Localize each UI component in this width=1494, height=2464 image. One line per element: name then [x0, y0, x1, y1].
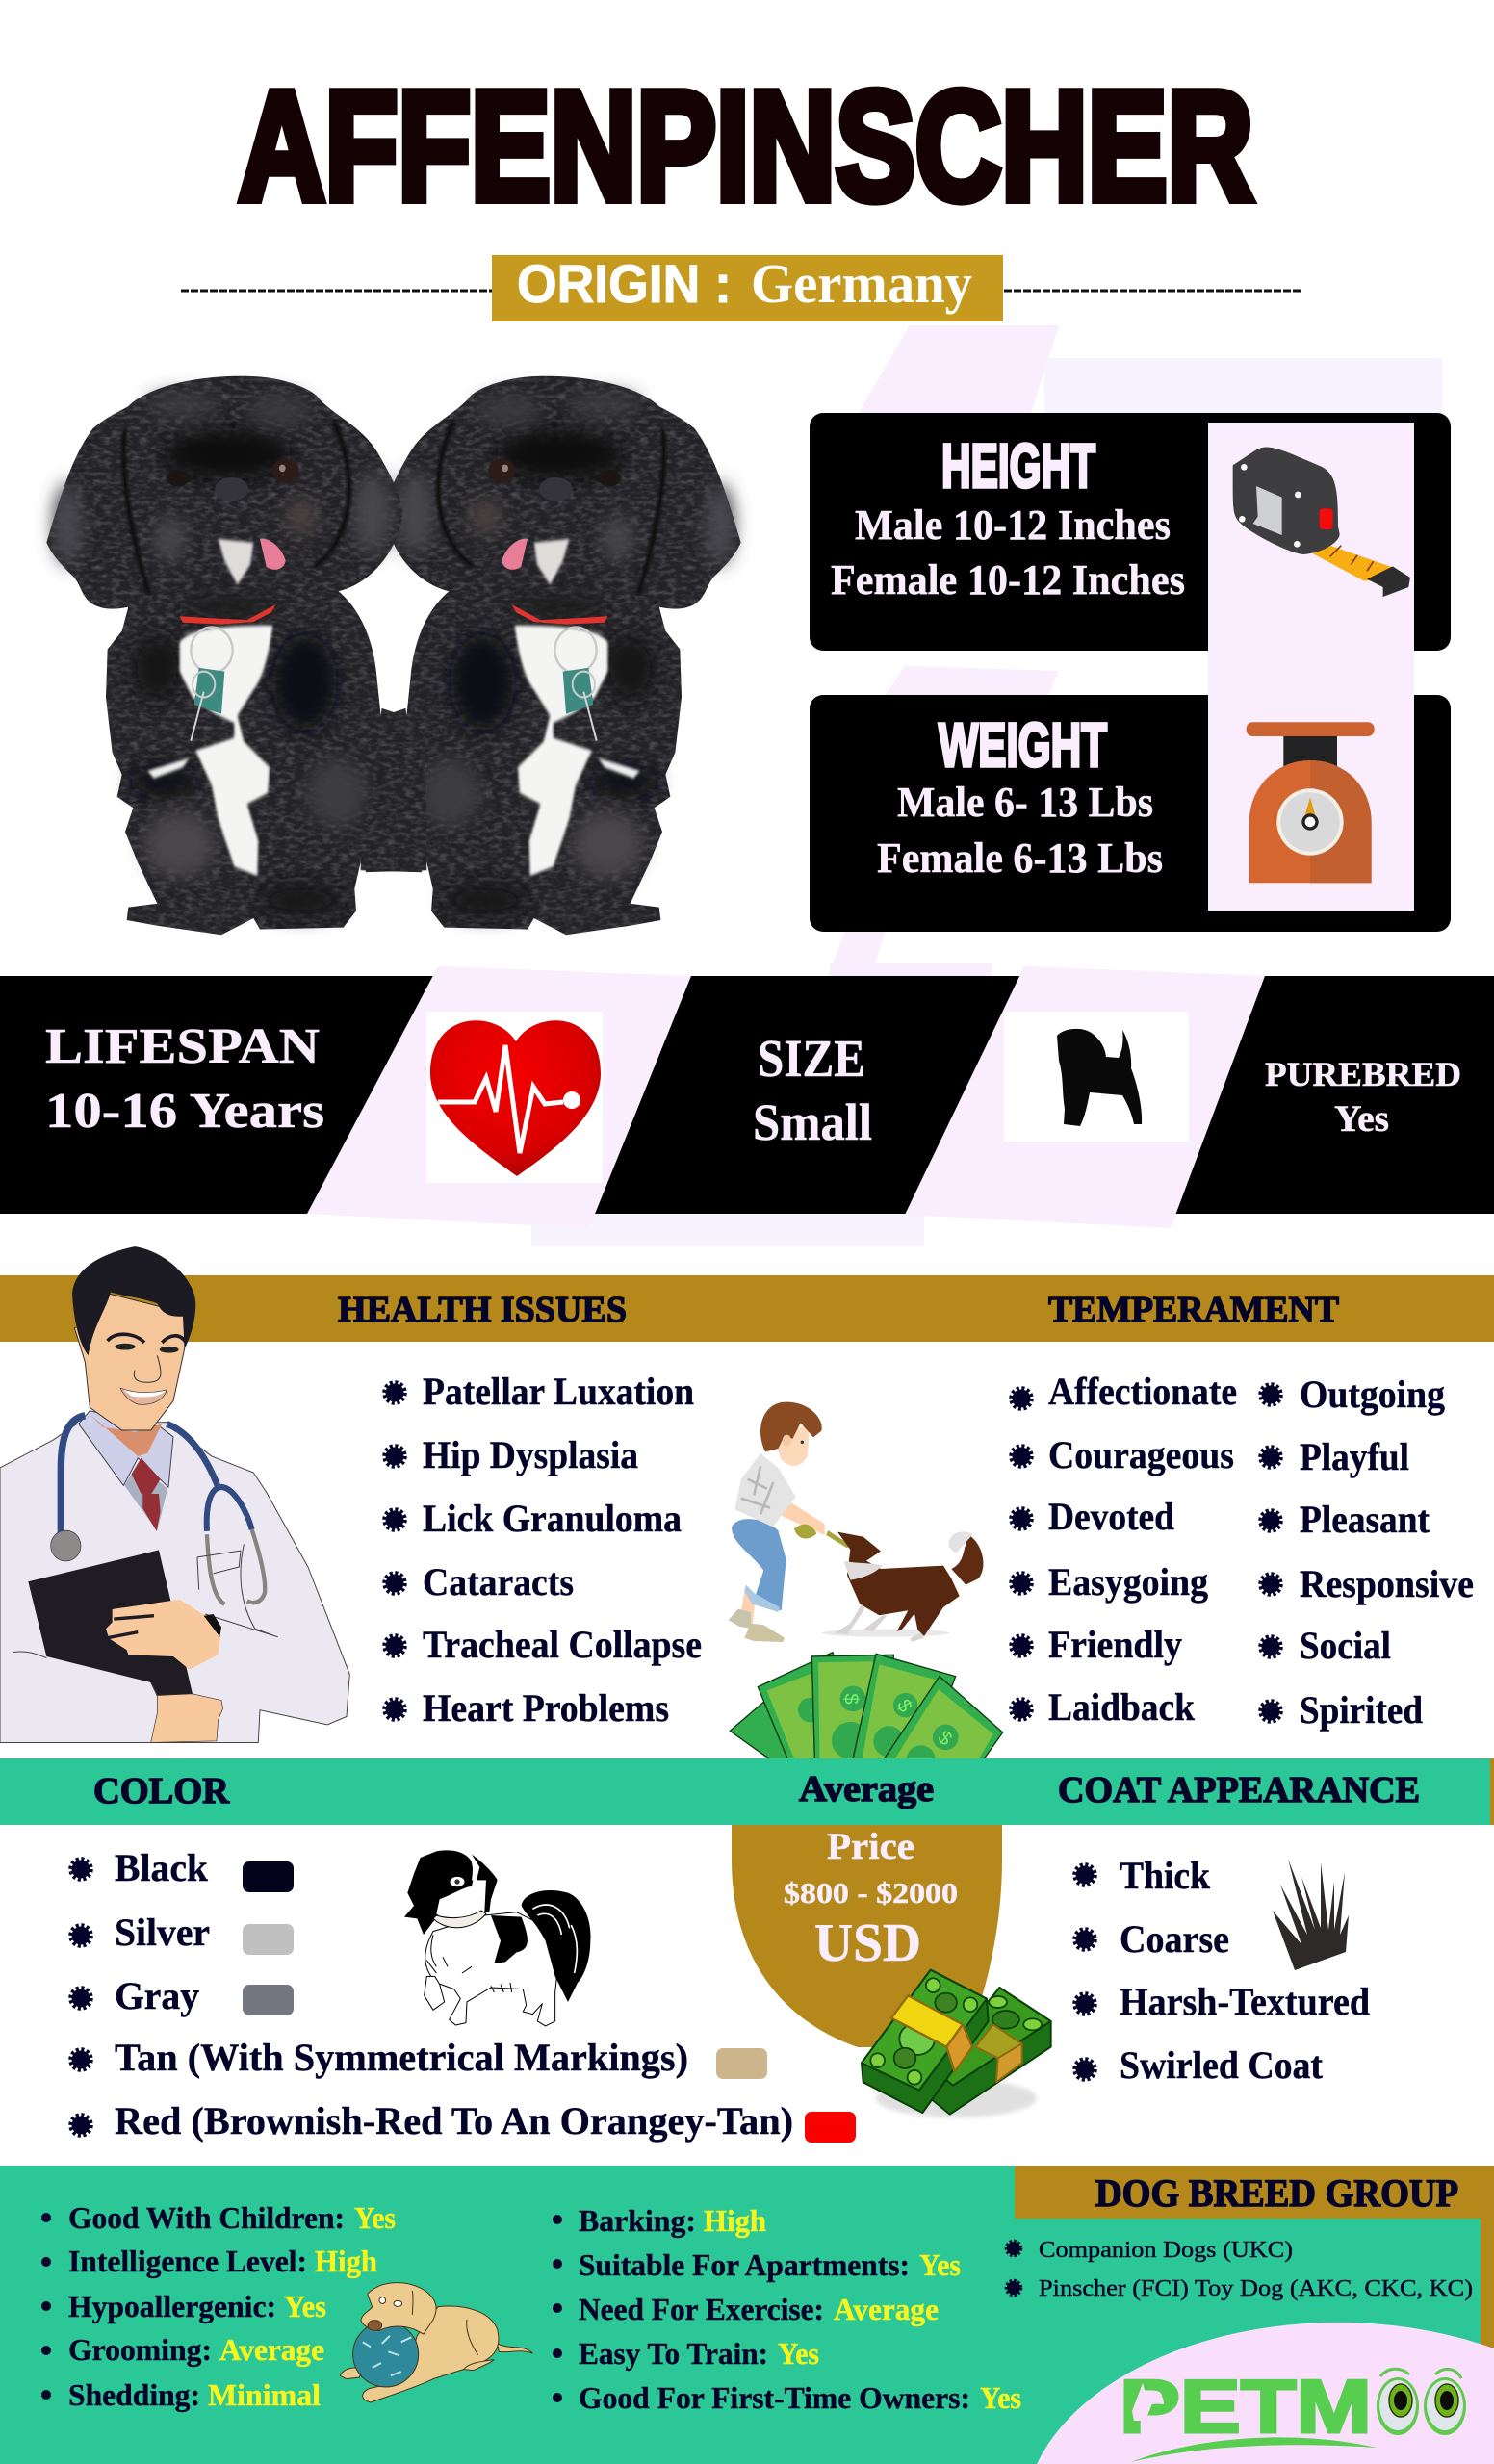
list: traits left: Intelligence Level:: [68, 2244, 307, 2278]
list: health issues: Patellar Luxation: [423, 1370, 694, 1413]
icon: cash stacks: [862, 1970, 1051, 2118]
list: traits left: Good With Children:: [68, 2200, 345, 2235]
green header band: [0, 1758, 1494, 1825]
green header band: Average: [799, 1769, 934, 1810]
lifespan band: 10-16 Years: [45, 1084, 324, 1139]
list: traits right: Average: [834, 2292, 939, 2326]
swatch: red: [805, 2112, 856, 2143]
icon: tape measure: [1233, 447, 1410, 597]
illustration: fan of banknotes: $: [934, 1726, 957, 1751]
list: colors with swatches: Tan (With Symmetrical Markings): [115, 2036, 688, 2079]
list: health issues: [385, 1370, 702, 1730]
list: temperament: Pleasant: [1300, 1498, 1430, 1541]
list: traits left: Minimal: [208, 2377, 321, 2412]
origin banner: Germany: [751, 252, 972, 315]
list: health issues: Heart Problems: [423, 1686, 669, 1730]
weight panel: [810, 695, 1451, 932]
list: dog breed group: Companion Dogs (UKC): [1039, 2238, 1293, 2263]
list: traits left: Average: [219, 2332, 324, 2367]
list: temperament: Laidback: [1048, 1685, 1196, 1729]
photo: two mirrored dogs: [46, 376, 741, 935]
list: traits left: Yes: [354, 2200, 396, 2235]
dog left: [46, 376, 426, 935]
list: colors with swatches: Gray: [115, 1974, 199, 2017]
icon: heart with pulse: [426, 1012, 603, 1183]
illustration: black and white dog line art: [404, 1850, 591, 2026]
swatch: silver: [243, 1924, 294, 1955]
list: coat appearance: Coarse: [1120, 1917, 1229, 1961]
list: traits right: Need For Exercise:: [579, 2292, 824, 2326]
background accent shapes: [531, 325, 1442, 1246]
height panel: Male 10-12 Inches: [855, 501, 1171, 549]
illustration: boy playing with dog: [729, 1402, 983, 1642]
list: traits left: Shedding:: [68, 2377, 200, 2412]
illustration: fan of banknotes: $: [892, 1696, 916, 1716]
list: traits right: High: [704, 2203, 766, 2238]
list: health issues: Hip Dysplasia: [423, 1433, 638, 1476]
icon: dog silhouette: [1004, 1012, 1189, 1142]
illustration: fan of banknotes: $: [840, 1693, 863, 1705]
price text: USD: [814, 1913, 921, 1973]
origin banner: [181, 252, 1302, 321]
price text: Price: [827, 1826, 914, 1867]
weight panel: WEIGHT: [939, 710, 1107, 780]
logo: PETMOO: [1037, 2323, 1494, 2464]
lifespan band: SIZE: [758, 1029, 865, 1088]
list: colors with swatches: Red (Brownish-Red To An Orangey-Tan): [115, 2099, 793, 2143]
list: traits right: Yes: [919, 2247, 961, 2282]
lifespan band: Yes: [1334, 1098, 1389, 1140]
height panel: [810, 413, 1451, 911]
illustration: doctor: [0, 1246, 349, 1743]
weight panel: Female 6-13 Lbs: [877, 834, 1163, 882]
height panel: Female 10-12 Inches: [831, 556, 1185, 603]
lifespan band: LIFESPAN: [45, 1019, 320, 1074]
list: temperament: [1011, 1370, 1474, 1732]
price text: $800 - $2000: [784, 1876, 958, 1910]
list: coat appearance: Harsh-Textured: [1120, 1980, 1370, 2023]
dog right: [361, 376, 741, 935]
list: traits right: Suitable For Apartments:: [579, 2247, 910, 2282]
gold header band: [0, 1275, 1494, 1342]
list: traits left: Grooming:: [68, 2332, 212, 2367]
icon: fur tuft: [1273, 1859, 1349, 1970]
list: traits right: Yes: [980, 2380, 1021, 2415]
list: traits left: High: [315, 2244, 377, 2278]
list: health issues: Lick Granuloma: [423, 1497, 682, 1540]
icon: weighing scale: [1247, 722, 1375, 883]
gold header band: HEALTH ISSUES: [338, 1290, 627, 1330]
lifespan band: PUREBRED: [1265, 1055, 1461, 1093]
logo eyes: [1377, 2369, 1466, 2435]
list: coat appearance: Swirled Coat: [1120, 2043, 1324, 2087]
list: temperament: Easygoing: [1048, 1560, 1208, 1604]
list: temperament: Courageous: [1048, 1433, 1234, 1476]
list: temperament: Playful: [1300, 1435, 1409, 1478]
weight panel: Male 6- 13 Lbs: [897, 779, 1153, 826]
price badge background: [732, 1819, 1002, 2047]
green header band: COLOR: [93, 1771, 230, 1811]
swatch: tan: [716, 2048, 767, 2079]
bottom green panel: [0, 2166, 1494, 2464]
bottom green panel: DOG BREED GROUP: [1095, 2171, 1458, 2215]
list: coat appearance: [1074, 1854, 1370, 2087]
illustration: dog with ball: [340, 2283, 532, 2402]
list: traits left: Yes: [284, 2289, 326, 2323]
list: dog breed group: Pinscher (FCI) Toy Dog (AKC, CKC, KC): [1039, 2276, 1473, 2301]
list: temperament: Affectionate: [1048, 1370, 1237, 1413]
logo: PETMOO: PETM: [1120, 2364, 1372, 2449]
lifespan band: Small: [753, 1093, 872, 1151]
list: traits right: Good For First-Time Owners:: [579, 2380, 970, 2415]
list: colors with swatches: Silver: [115, 1911, 210, 1954]
swatch: black: [243, 1861, 294, 1892]
origin banner: ORIGIN :: [517, 253, 732, 314]
illustration: fan of banknotes: [730, 1653, 1003, 1774]
list: traits right: Barking:: [579, 2203, 696, 2238]
list: colors with swatches: Black: [115, 1846, 209, 1889]
list: dog breed group: [1007, 2238, 1473, 2301]
price text: [784, 1826, 958, 1973]
list: temperament: Outgoing: [1300, 1373, 1445, 1416]
lifespan band: [0, 966, 1494, 1228]
list: temperament: Responsive: [1300, 1562, 1474, 1605]
list: temperament: Devoted: [1048, 1495, 1174, 1538]
list: temperament: Spirited: [1300, 1688, 1423, 1732]
list: coat appearance: Thick: [1120, 1854, 1211, 1897]
swatch: gray: [243, 1985, 294, 2015]
list: temperament: Friendly: [1048, 1623, 1182, 1666]
list: traits right: Yes: [778, 2336, 819, 2371]
list: traits left: [41, 2200, 396, 2412]
list: temperament: Social: [1300, 1624, 1391, 1667]
list: health issues: Cataracts: [423, 1560, 574, 1604]
green header band: COAT APPEARANCE: [1058, 1770, 1420, 1810]
list: traits right: Easy To Train:: [579, 2336, 768, 2371]
height panel: HEIGHT: [941, 431, 1095, 500]
list: traits left: Hypoallergenic:: [68, 2289, 276, 2323]
list: traits right: [553, 2203, 1021, 2415]
list: health issues: Tracheal Collapse: [423, 1623, 702, 1666]
gold header band: TEMPERAMENT: [1048, 1290, 1339, 1330]
list: colors with swatches: [71, 1846, 856, 2143]
